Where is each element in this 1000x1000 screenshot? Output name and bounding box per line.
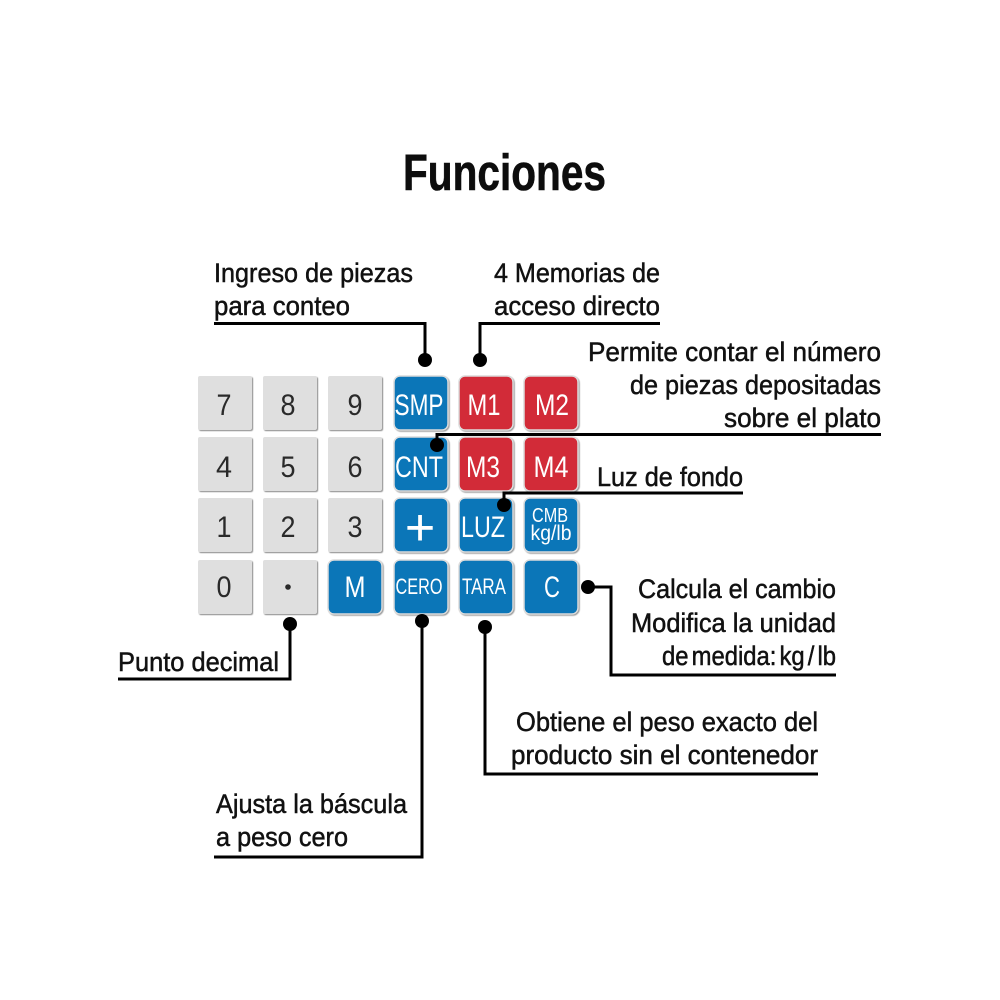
callout: 4 Memorias: acceso directo <box>494 291 660 321</box>
key M: M <box>344 571 366 604</box>
key M2: M2 <box>535 389 569 422</box>
key M <box>328 560 382 614</box>
key 2 <box>263 498 317 552</box>
key 2: 2 <box>280 511 296 544</box>
key M3 <box>459 437 513 491</box>
key CNT <box>394 437 448 491</box>
key 5: 5 <box>280 451 296 484</box>
callout: Ingreso de piezas: Ingreso de piezas <box>214 258 413 288</box>
key CMB kg/lb: kg/lb <box>530 522 572 545</box>
key plus: + <box>405 499 435 557</box>
callout: Punto decimal: Punto decimal <box>118 647 279 677</box>
key CERO <box>394 560 448 614</box>
key C: C <box>544 571 560 604</box>
keypad <box>198 376 578 614</box>
key CNT: CNT <box>395 451 443 484</box>
key 7: 7 <box>216 389 232 422</box>
key SMP: SMP <box>394 389 444 422</box>
callout: 4 Memorias: 4 Memorias de <box>494 258 660 288</box>
key CMB kg/lb: CMB <box>532 505 568 527</box>
callout: Obtiene el peso: Obtiene el peso exacto del <box>516 707 818 737</box>
key 9: 9 <box>348 389 362 422</box>
key 4 <box>198 437 252 491</box>
key 5 <box>263 437 317 491</box>
callout: Permite contar <box>430 337 881 452</box>
key decimal point <box>263 560 317 614</box>
key CERO: CERO <box>396 574 442 599</box>
key 3 <box>328 498 382 552</box>
callout: Permite contar: de piezas depositadas <box>630 370 881 400</box>
key 6 <box>328 437 382 491</box>
callout: Luz de fondo <box>497 462 743 512</box>
key 1: 1 <box>216 511 232 544</box>
callout: Calcula el cambio: de medida: kg / lb <box>662 641 836 671</box>
callout: Luz de fondo: Luz de fondo <box>597 462 743 492</box>
key 6: 6 <box>348 451 362 484</box>
key 7 <box>198 376 252 430</box>
key M1 <box>459 376 513 430</box>
callout: 4 Memorias <box>473 258 660 367</box>
key C <box>524 560 578 614</box>
callout: Calcula el cambio: Calcula el cambio <box>638 574 836 604</box>
key 3: 3 <box>348 511 362 544</box>
key 4: 4 <box>216 451 232 484</box>
callout: Ajusta la bascula: Ajusta la báscula <box>216 789 408 819</box>
callout: Obtiene el peso: producto sin el contenedor <box>511 740 818 770</box>
callout: Ingreso de piezas <box>214 258 432 367</box>
key SMP <box>394 376 448 430</box>
key 9 <box>328 376 382 430</box>
callout: Ingreso de piezas: para conteo <box>214 291 350 321</box>
key M4: M4 <box>534 451 568 484</box>
callout: Ajusta la bascula: a peso cero <box>216 822 348 852</box>
key M3: M3 <box>466 451 500 484</box>
key TARA: TARA <box>462 574 506 599</box>
key CMB kg/lb <box>524 498 578 552</box>
callout: Permite contar: Permite contar el número <box>588 337 881 367</box>
key LUZ <box>459 498 513 552</box>
key TARA <box>459 560 513 614</box>
title: Funciones <box>403 144 606 201</box>
key M1: M1 <box>468 389 500 422</box>
key M2 <box>524 376 578 430</box>
callout: Ajusta la bascula <box>214 614 429 857</box>
key 1 <box>198 498 252 552</box>
key 8 <box>263 376 317 430</box>
key 8: 8 <box>280 389 296 422</box>
callout: Calcula el cambio: Modifica la unidad <box>631 608 836 638</box>
callout: Punto decimal <box>118 617 297 679</box>
key plus <box>394 498 448 557</box>
callout: Obtiene el peso <box>478 620 818 774</box>
callout: Calcula el cambio <box>581 574 836 675</box>
callout: Permite contar: sobre el plato <box>724 403 881 433</box>
key M4 <box>524 437 578 491</box>
key LUZ: LUZ <box>461 511 505 544</box>
key 0: 0 <box>216 571 232 604</box>
key 0 <box>198 560 252 614</box>
